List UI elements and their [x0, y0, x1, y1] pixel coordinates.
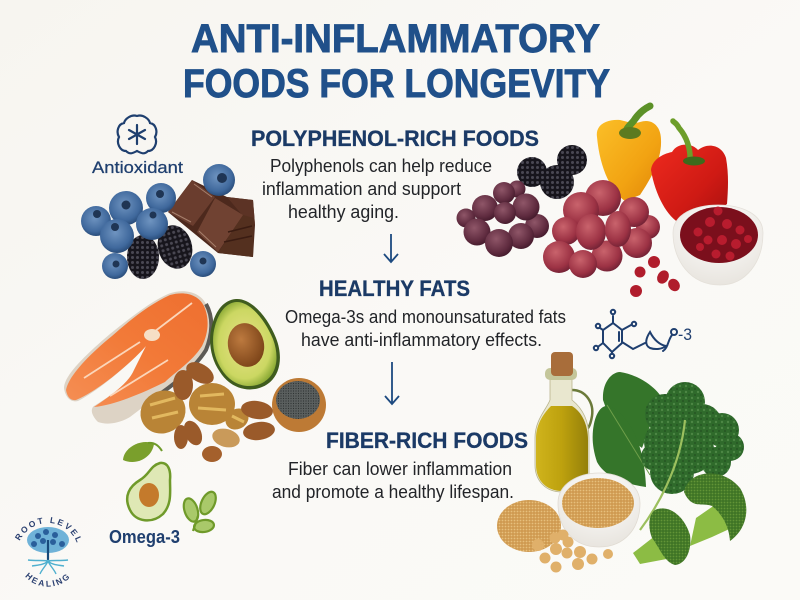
arrow: fats to fiber: [385, 362, 399, 404]
text: fiber description: Fiber can lower inflammation: [288, 459, 512, 479]
walnuts: [133, 382, 252, 442]
section: healthy fats: [285, 276, 566, 350]
icon: molecule omega-3: [594, 310, 692, 358]
chocolate: [168, 180, 255, 257]
pomegranate seeds: [630, 256, 682, 297]
section: polyphenol-rich foods: [251, 126, 539, 222]
text: healthy fats description: [285, 307, 566, 350]
chia bowl: [272, 378, 326, 432]
text: fiber description: [272, 459, 514, 502]
logo text: HEALING: [25, 572, 69, 587]
icon: avocado outline: [127, 463, 170, 520]
text: polyphenol description: [262, 156, 492, 222]
spinach: [593, 372, 660, 487]
heading: healthy fats: HEALTHY FATS: [319, 276, 470, 301]
text: healthy fats description: Omega-3s and monounsaturated fats: [285, 307, 566, 327]
food group: blueberries and chocolate: [81, 164, 255, 279]
pomegranate bowl: [673, 205, 763, 285]
broccoli right: [684, 473, 746, 546]
section: fiber-rich foods: [272, 428, 528, 502]
omega-3 badge: [109, 442, 219, 547]
food group: salmon, avocado, nuts, chia: [64, 291, 326, 462]
label: omega-3: Omega-3: [109, 527, 180, 547]
text: fiber description: and promote a healthy lifespan.: [272, 482, 514, 502]
text: polyphenol description: healthy aging.: [288, 202, 399, 222]
logo tree: [27, 527, 69, 574]
icon: antioxidant badge: [92, 116, 183, 177]
avocado half: [210, 299, 280, 389]
label: antioxidant: Antioxidant: [92, 158, 183, 177]
title: FOODS FOR LONGEVITY: [183, 62, 610, 106]
chickpeas: [532, 530, 613, 572]
icon: leaf: [123, 442, 162, 462]
blackberries: [127, 221, 197, 279]
icon: sprig: [181, 489, 219, 533]
title: ANTI-INFLAMMATORY: [191, 17, 600, 61]
heading: fiber-rich foods: FIBER-RICH FOODS: [326, 428, 528, 453]
almonds and cashew: [173, 358, 276, 462]
logo: root level healing: [14, 517, 81, 587]
text: healthy fats description: have anti-inflammatory effects.: [301, 330, 542, 350]
blueberries: [81, 164, 235, 279]
label: molecule -3: -3: [678, 325, 692, 344]
grain bowl: [558, 473, 640, 547]
text: polyphenol description: inflammation and support: [262, 179, 461, 199]
olive oil bottle: [535, 352, 592, 492]
heading: polyphenol-rich foods: POLYPHENOL-RICH FOODS: [251, 126, 539, 151]
arrow: polyphenols to fats: [384, 234, 398, 262]
logo text: ROOT LEVEL: [14, 517, 81, 542]
salmon steak: [64, 291, 211, 424]
yellow pepper: [597, 106, 661, 201]
logo text: [14, 517, 81, 587]
text: polyphenol description: Polyphenols can help reduce: [270, 156, 492, 176]
dark grapes: [456, 180, 549, 257]
food group: berries, grapes, peppers, pomegranate: [456, 106, 763, 297]
food group: oil, greens, grains, broccoli: [497, 352, 746, 572]
blackberries: [517, 145, 587, 199]
broccoli left: [633, 508, 690, 565]
title: [183, 17, 610, 106]
kale: [640, 382, 744, 530]
grain pile: [497, 500, 561, 552]
red grapes: [543, 180, 660, 278]
icon: antioxidant flower: [118, 116, 156, 153]
red pepper: [651, 121, 728, 225]
